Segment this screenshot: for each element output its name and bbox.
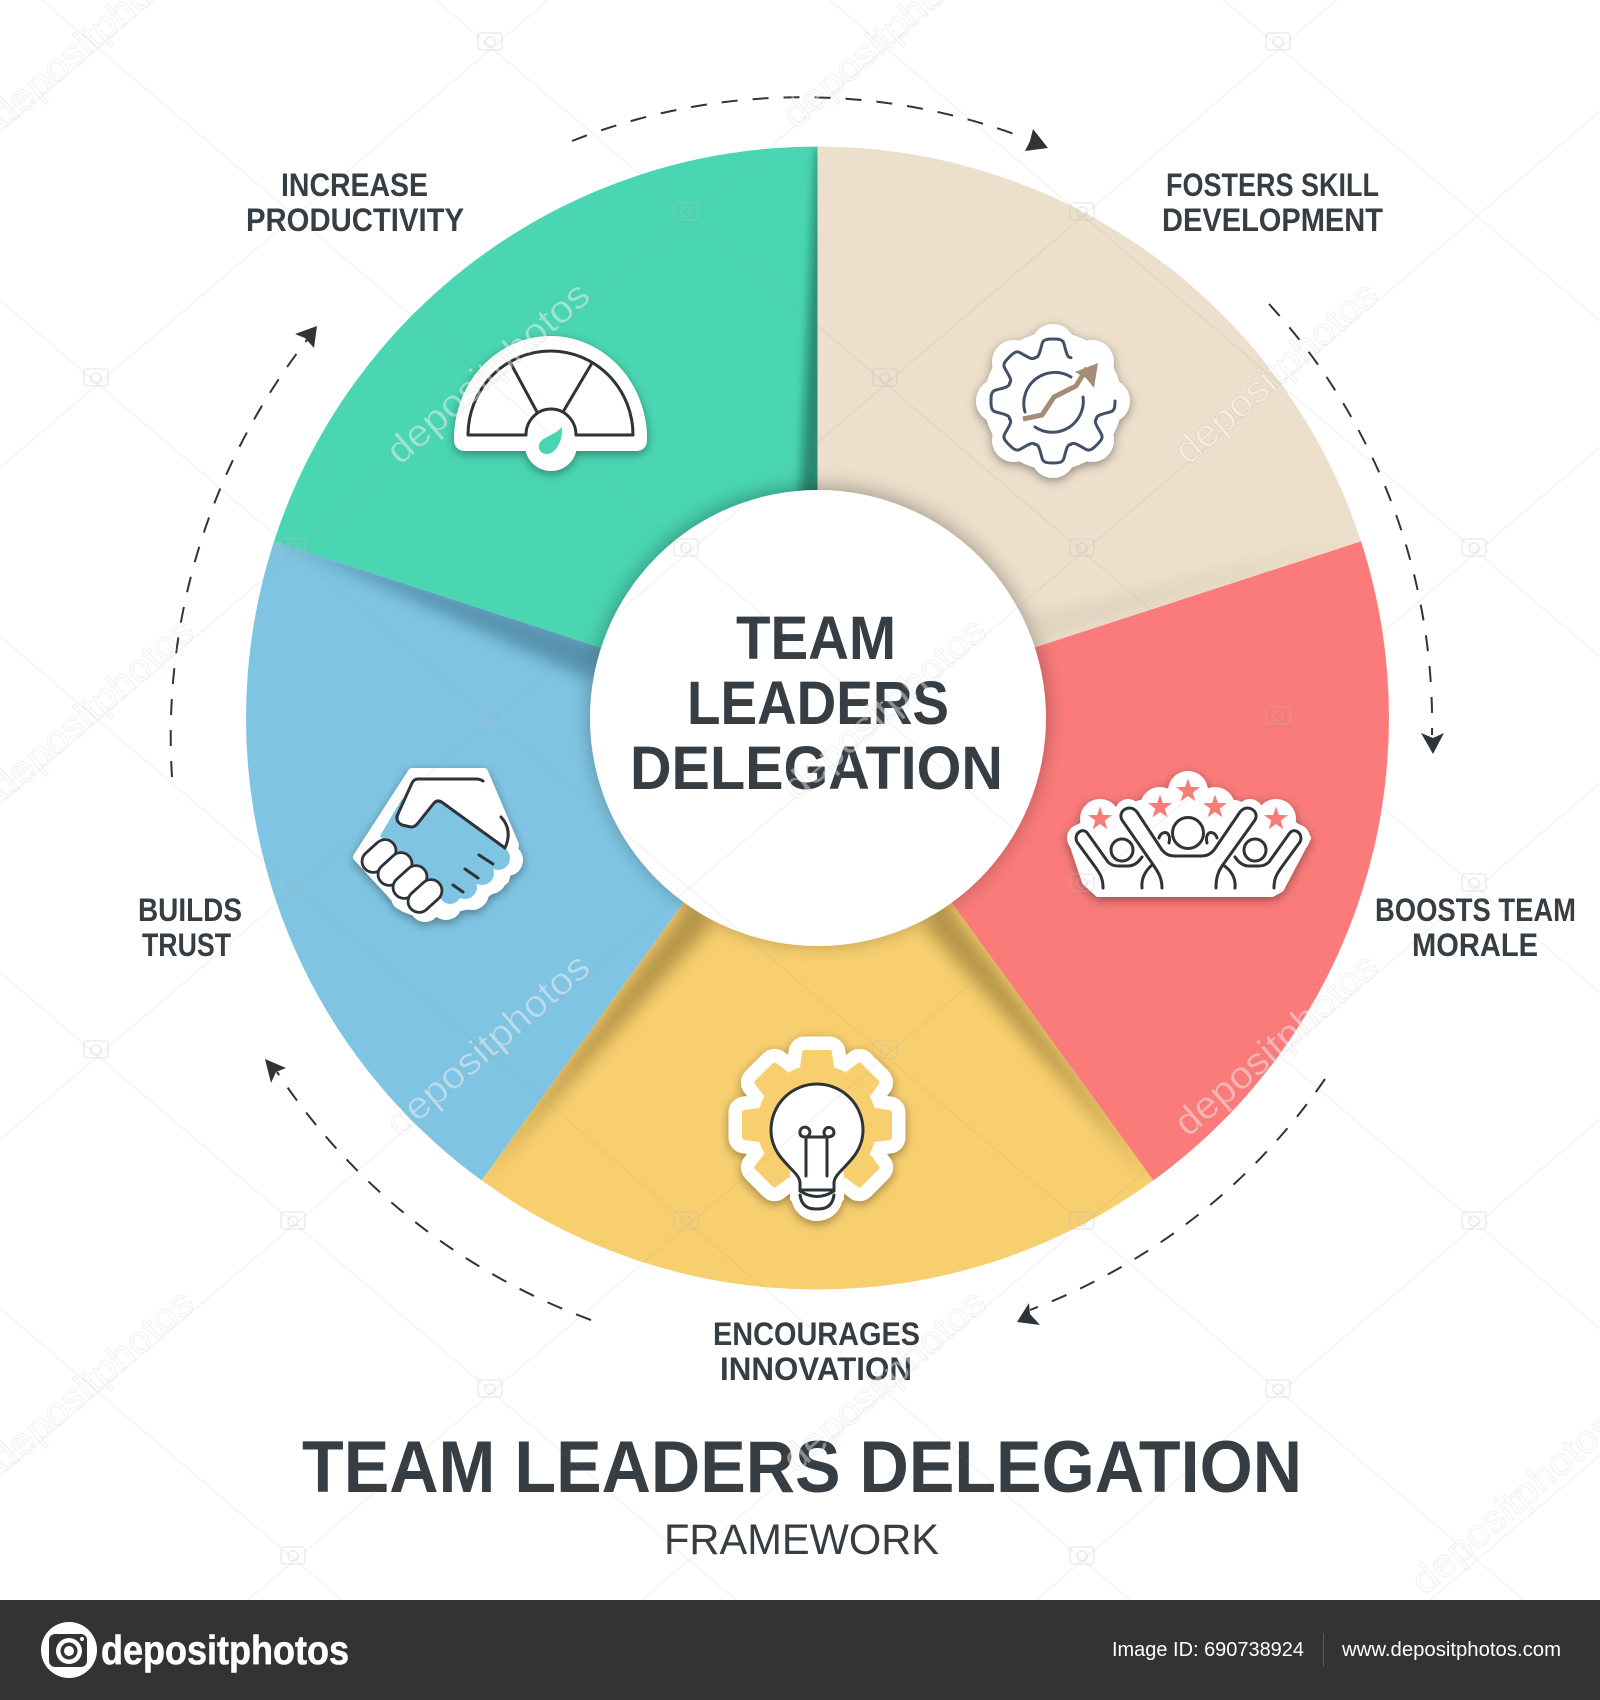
center circle — [590, 490, 1046, 946]
label: boosts team morale: MORALE — [1412, 927, 1538, 963]
depositphotos watermarks: depositphotos — [378, 946, 598, 1145]
segment: builds trust — [246, 541, 818, 1180]
camera watermarks — [84, 33, 1486, 1564]
icon: handshake — [357, 772, 523, 922]
label: builds trust: BUILDS — [138, 892, 242, 928]
label: fosters skill development — [1162, 167, 1383, 238]
depositphotos watermarks: depositphotos — [378, 274, 598, 473]
segment: increase productivity — [274, 146, 818, 718]
icon: gear with growth arrow — [976, 324, 1130, 478]
label: builds trust: TRUST — [142, 927, 231, 963]
center title — [630, 604, 1003, 802]
footer logo icon — [41, 1622, 97, 1678]
website: www.depositphotos.com — [1341, 1639, 1561, 1661]
center title: TEAM — [736, 604, 896, 672]
label: increase productivity: INCREASE — [281, 167, 428, 203]
depositphotos watermarks: depositphotos — [1166, 946, 1386, 1145]
depositphotos watermarks: depositphotos — [1166, 274, 1386, 473]
center title: LEADERS — [687, 669, 949, 737]
segment: boosts team morale — [818, 541, 1389, 1180]
cycle arrow: morale to innovation — [1017, 1079, 1325, 1325]
main title: TEAM LEADERS DELEGATION — [302, 1427, 1302, 1508]
label: increase productivity — [246, 167, 464, 238]
segment: encourages innovation — [482, 718, 1153, 1290]
label: increase productivity: PRODUCTIVITY — [246, 202, 464, 238]
icon: speedometer gauge — [454, 336, 647, 471]
image id: Image ID: 690738924 — [1112, 1639, 1304, 1661]
seam shadows — [270, 150, 1365, 1185]
label: fosters skill development: DEVELOPMENT — [1162, 202, 1383, 238]
cycle arrow: innovation to trust — [265, 1059, 591, 1320]
label: fosters skill development: FOSTERS SKILL — [1166, 167, 1379, 203]
label: boosts team morale — [1375, 892, 1576, 963]
cycle arrow: productivity to skill development — [572, 97, 1048, 151]
footer logo text: depositphotos — [101, 1627, 349, 1673]
segment: fosters skill development — [818, 146, 1361, 718]
cycle arrow: skill development to morale — [1269, 304, 1444, 754]
label: encourages innovation — [713, 1316, 920, 1387]
label: builds trust — [138, 892, 242, 963]
depositphotos watermarks: depositphotos — [774, 610, 994, 809]
footer bar — [0, 1600, 1600, 1700]
circular diagram — [246, 146, 1389, 1290]
icon: light bulb in gear — [742, 1050, 892, 1221]
subtitle: FRAMEWORK — [664, 1516, 939, 1564]
label: encourages innovation: INNOVATION — [720, 1351, 912, 1387]
center title: DELEGATION — [630, 734, 1003, 802]
depositphotos watermarks: depositphotos — [774, 1282, 994, 1481]
label: encourages innovation: ENCOURAGES — [713, 1316, 920, 1352]
cycle arrow: trust to productivity — [171, 326, 317, 777]
icon: team with stars — [1067, 771, 1310, 894]
